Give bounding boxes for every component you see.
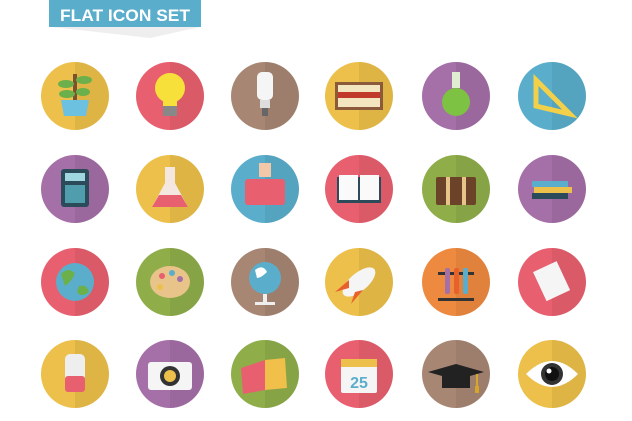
icon: earth [41, 248, 109, 316]
icon: beaker [136, 155, 204, 223]
icon: document [518, 248, 586, 316]
icon: graduation cap [422, 340, 490, 408]
icon: briefcase hand [231, 155, 299, 223]
icon: calculator [41, 155, 109, 223]
icon: calendar [325, 340, 393, 408]
icon: suitcase [422, 155, 490, 223]
icon: open book [231, 340, 299, 408]
icon: plant [41, 62, 109, 130]
icon: set square [518, 62, 586, 130]
icon: eraser [41, 340, 109, 408]
icon: calendar: 25 [350, 375, 368, 392]
icon: test tubes [422, 248, 490, 316]
icon: rocket [325, 248, 393, 316]
icon: book [325, 155, 393, 223]
title banner [49, 0, 201, 38]
icon: books stack [518, 155, 586, 223]
icon: cfl bulb [231, 62, 299, 130]
title banner: FLAT ICON SET [60, 6, 191, 25]
icon: globe [231, 248, 299, 316]
icon: camera [136, 340, 204, 408]
icon: light bulb [136, 62, 204, 130]
icon: palette [136, 248, 204, 316]
icon: flask [422, 62, 490, 130]
icon: eye [518, 340, 586, 408]
icon: abacus [325, 62, 393, 130]
